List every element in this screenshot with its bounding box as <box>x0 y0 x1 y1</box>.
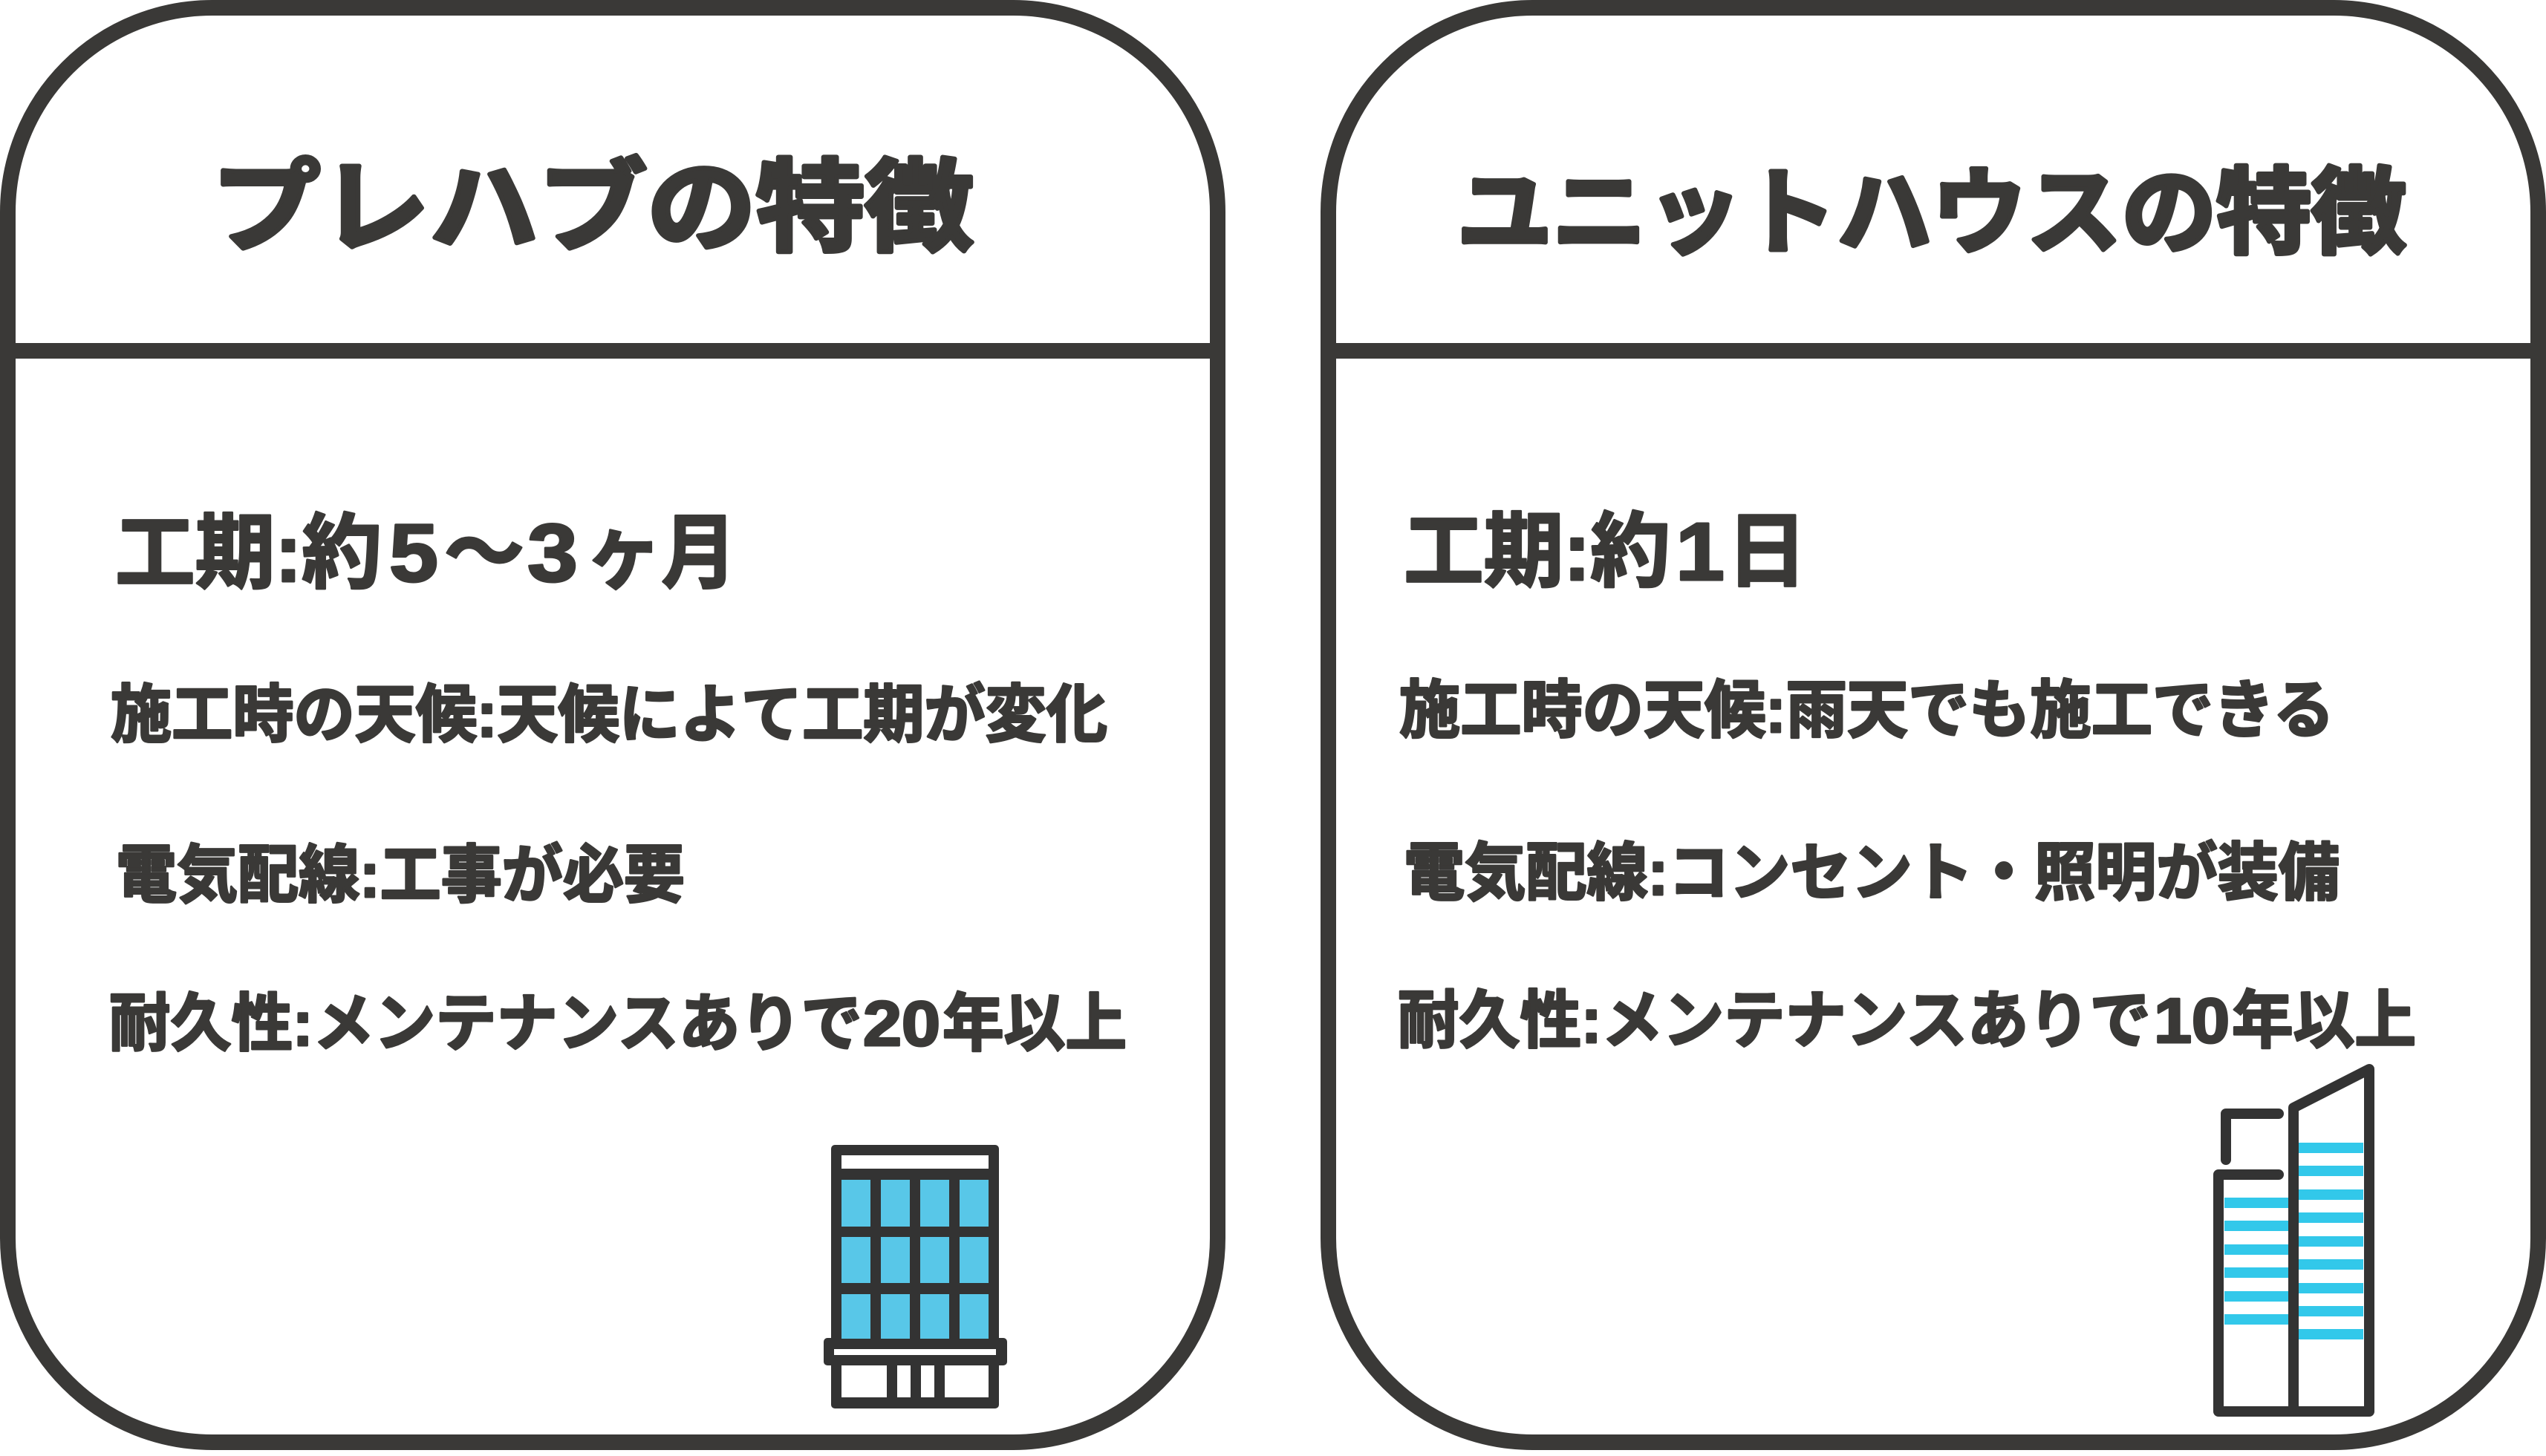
text: durability: 耐久性:メンテナンスありで <box>109 989 862 1060</box>
panel outline: prefab <box>7 7 1218 1442</box>
text: durability: 年以上 <box>2232 986 2416 1057</box>
panel outline: unit house <box>1328 7 2539 1442</box>
icon: office building <box>824 1145 1007 1408</box>
text: weather during construction: 施工時の天候:雨天でも施工できる <box>1399 676 2334 746</box>
panel: prefab features <box>7 7 1218 1442</box>
text: construction period <box>115 508 737 599</box>
header divider: prefab <box>7 343 1218 359</box>
text: construction period <box>1404 506 1807 598</box>
text: durability: 10 <box>2154 986 2230 1057</box>
text: construction period: 5 <box>389 508 438 599</box>
heading: prefab: プレハブの特徴 <box>212 151 974 264</box>
heading: unit house: ユニットハウスの特徴 <box>1457 160 2406 266</box>
text: electrical wiring: 電気配線:工事が必要 <box>116 840 685 911</box>
header divider: unit house <box>1328 343 2539 359</box>
text: durability: 20 <box>863 989 940 1060</box>
text: construction period: 工期:約 <box>115 508 382 599</box>
text: construction period: 工期:約 <box>1404 506 1670 598</box>
text: construction period: ～ <box>444 508 524 599</box>
text: construction period: 1 <box>1676 506 1725 598</box>
panel: unit house features <box>1328 7 2539 1442</box>
text: weather during construction: 施工時の天候:天候によて工期が変化 <box>111 680 1107 751</box>
text: durability: 耐久性:メンテナンスありで <box>1398 986 2151 1057</box>
text: durability: 年以上 <box>942 989 1127 1060</box>
text: construction period: 3 <box>527 508 578 599</box>
icon: twin towers <box>2218 1069 2369 1411</box>
text: construction period: ヶ月 <box>586 508 737 599</box>
text: construction period: 日 <box>1727 506 1807 598</box>
text: electrical wiring: 電気配線:コンセント・照明が装備 <box>1404 838 2340 909</box>
